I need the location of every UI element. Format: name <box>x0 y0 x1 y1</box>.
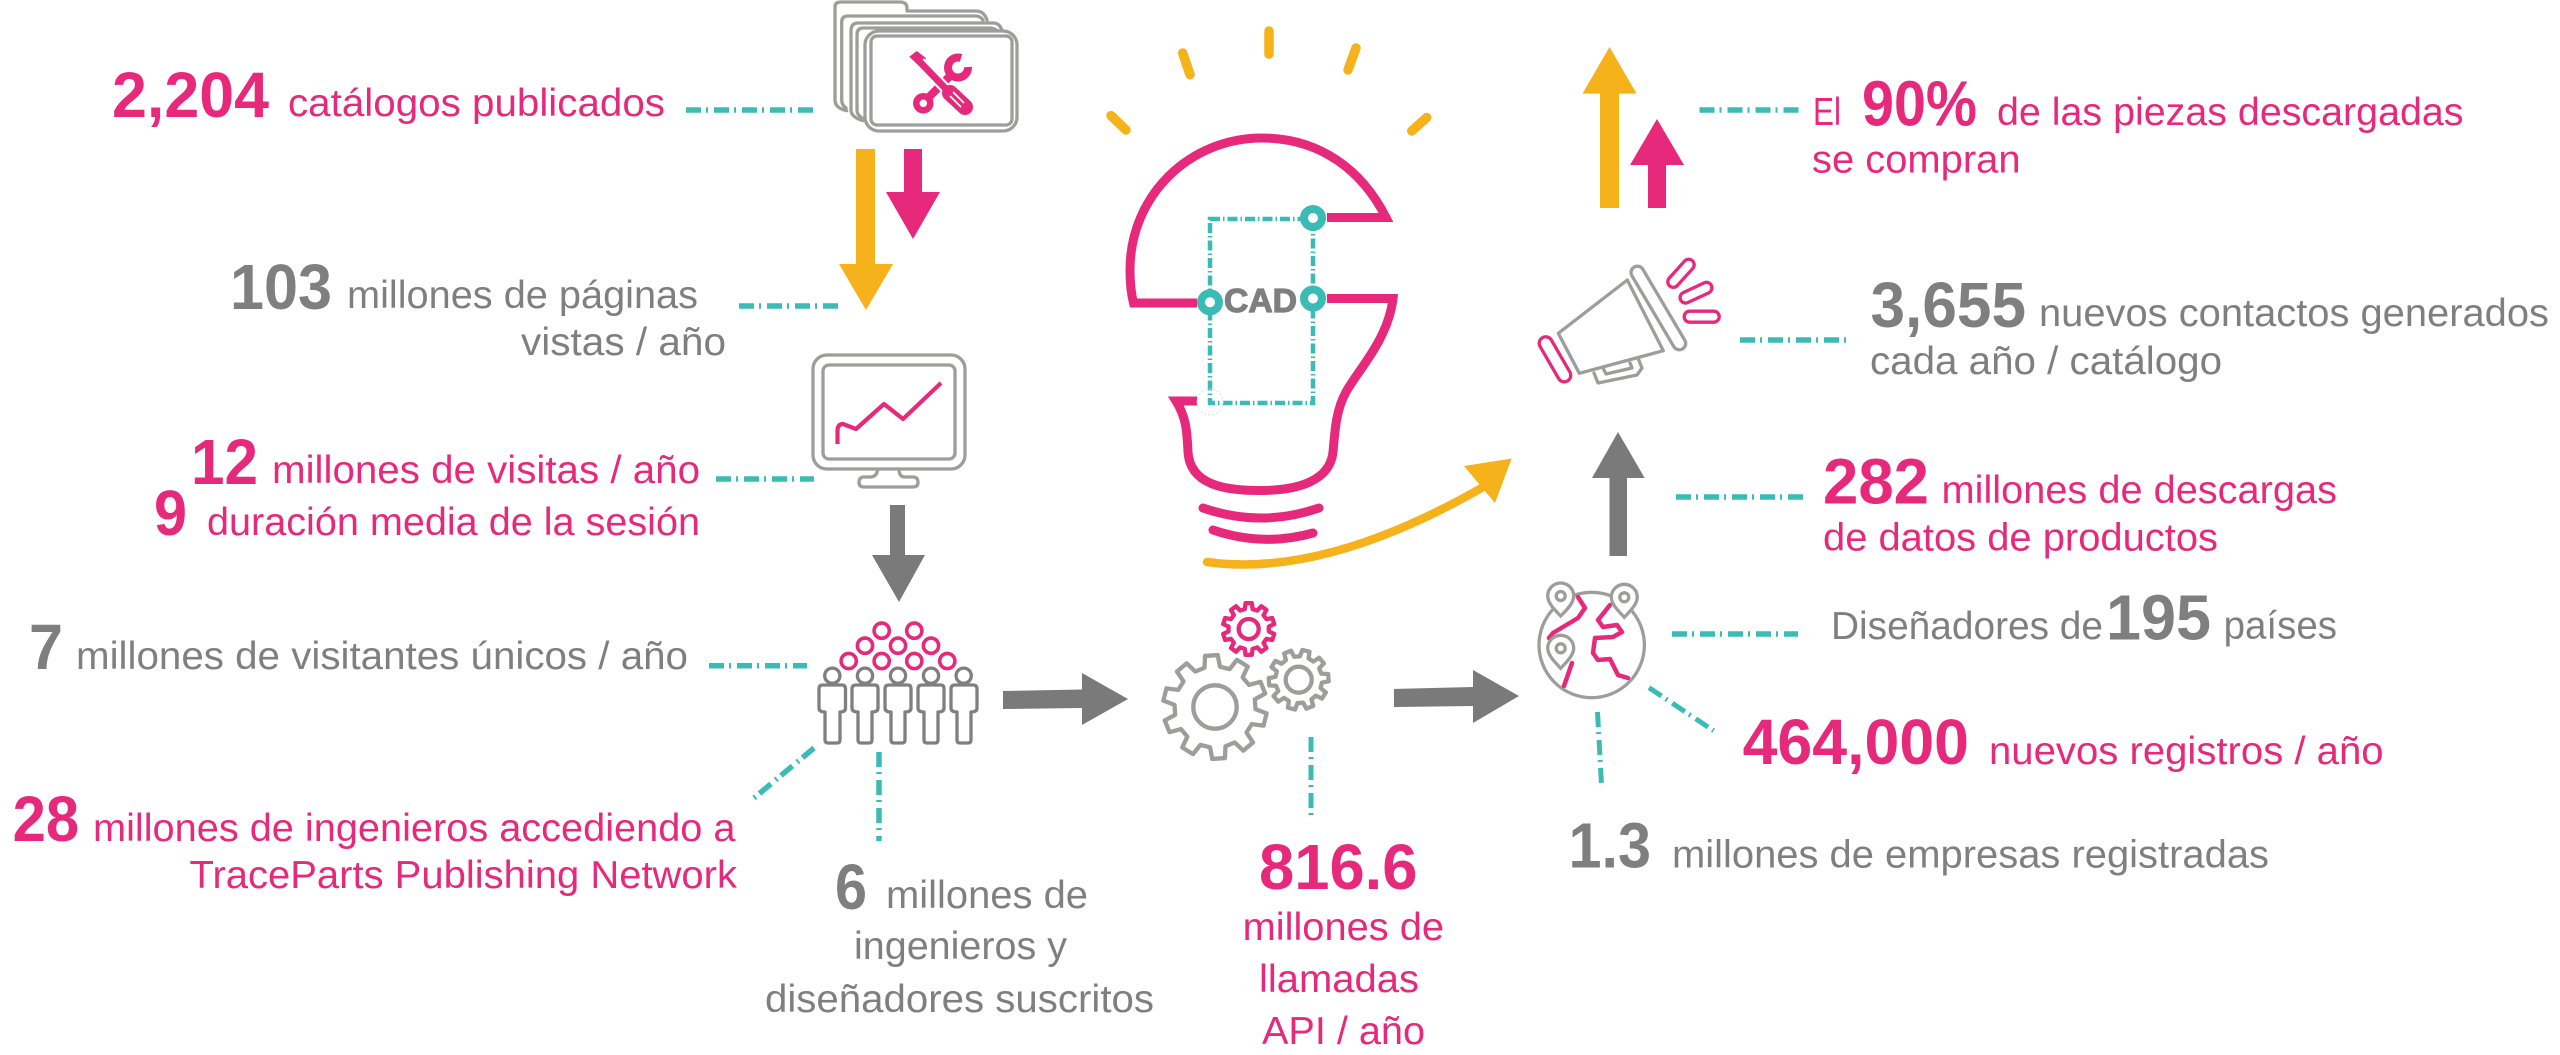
stat: paises <box>1831 581 2337 653</box>
stat: nuevos contactos <box>1870 269 2549 383</box>
stat: llamadas API: API / año <box>1262 1010 1425 1053</box>
stat: ingenieros suscritos: ingenieros y <box>854 925 1068 968</box>
stat: nuevos registros: 464,000 <box>1743 706 1969 778</box>
stat: ingenieros accediendo: TraceParts Publishing Network <box>190 854 738 897</box>
arrow: gray up <box>1592 432 1645 556</box>
stat: descargas: 282 <box>1823 446 1929 518</box>
stat: ingenieros suscritos: 6 <box>835 851 867 923</box>
stat: descargas: millones de descargas <box>1942 469 2337 512</box>
stat: paises: Diseñadores de <box>1831 605 2103 648</box>
stat: catalogos publicados <box>112 59 665 131</box>
arrow: gray right to globe <box>1394 670 1519 723</box>
stat: piezas compradas <box>1812 68 2464 182</box>
leader: ingenieros diagonal <box>754 748 814 798</box>
leader: visitantes <box>709 663 807 668</box>
stat: nuevos registros <box>1743 706 2384 778</box>
stat: nuevos contactos: 3,655 <box>1870 269 2026 341</box>
arrow: gray right to gears <box>1003 673 1128 725</box>
icon: group of people <box>819 623 977 743</box>
stat: visitantes unicos <box>29 611 688 683</box>
stat: piezas compradas: de las piezas descargadas <box>1997 91 2464 134</box>
stat: catalogos publicados: 2,204 <box>112 59 269 131</box>
icon: gears <box>1160 603 1334 762</box>
stat: visitas y duracion: millones de visitas / año <box>272 449 700 492</box>
stat: paginas vistas: 103 <box>230 251 332 323</box>
stat: visitas y duracion: duración media de la sesión <box>207 501 700 544</box>
leader: registros diagonal <box>1649 688 1714 731</box>
CAD label: CAD <box>1224 282 1297 319</box>
rays <box>1111 31 1427 131</box>
icon: light bulb with CAD <box>1111 31 1427 539</box>
leader: piezas <box>1700 107 1799 113</box>
stat: paises: 195 <box>2106 581 2211 653</box>
stat: llamadas API: 816.6 <box>1259 831 1418 903</box>
stat: ingenieros accediendo: millones de ingenieros accediendo a <box>93 807 736 850</box>
stat: empresas registradas <box>1568 810 2269 882</box>
stat: descargas: de datos de productos <box>1823 517 2218 560</box>
stat: visitas y duracion: 12 <box>191 426 258 498</box>
stat: ingenieros accediendo <box>13 783 738 897</box>
stat: llamadas API: llamadas <box>1259 958 1419 1001</box>
stat: visitantes unicos: millones de visitantes únicos / año <box>76 635 688 678</box>
arrow: yellow up <box>1582 47 1637 208</box>
stat: ingenieros suscritos: millones de <box>886 874 1088 917</box>
stat: nuevos contactos: cada año / catálogo <box>1870 340 2222 383</box>
stat: nuevos registros: nuevos registros / año <box>1989 730 2384 773</box>
stat: llamadas API <box>1243 831 1444 1053</box>
stat: ingenieros accediendo: 28 <box>13 783 79 855</box>
leader: catalogos <box>686 107 814 113</box>
leader: visitas <box>716 476 814 482</box>
arrow: yellow down <box>839 149 893 310</box>
stat: piezas compradas: El <box>1813 91 1841 134</box>
icon: megaphone <box>1537 257 1719 384</box>
stat: nuevos contactos: nuevos contactos generados <box>2039 292 2549 335</box>
stat: empresas registradas: 1.3 <box>1568 810 1651 882</box>
leader: suscritos vertical <box>876 752 882 841</box>
arrow: yellow curved <box>1207 458 1512 564</box>
leader: empresas vertical <box>1598 712 1602 788</box>
stat: paginas vistas: millones de páginas <box>347 274 698 317</box>
leader: paises <box>1672 631 1798 637</box>
stat: piezas compradas: se compran <box>1812 138 2021 182</box>
leader: descargas <box>1676 494 1803 500</box>
nodes <box>1201 209 1322 311</box>
arrow: pink down <box>886 149 940 239</box>
stat: paginas vistas: vistas / año <box>521 321 726 364</box>
arrow: pink up <box>1630 119 1684 208</box>
icon: globe with pins <box>1539 583 1644 698</box>
stat: empresas registradas: millones de empresas registradas <box>1672 834 2269 876</box>
stat: llamadas API: millones de <box>1243 906 1444 949</box>
stat: piezas compradas: 90% <box>1862 68 1977 140</box>
stat: paginas vistas <box>230 251 726 364</box>
stat: ingenieros suscritos <box>765 851 1154 1021</box>
bulb outline <box>1130 138 1393 539</box>
stat: ingenieros suscritos: diseñadores suscritos <box>765 978 1154 1021</box>
dashed CAD box <box>1210 219 1313 403</box>
arrow: gray down <box>872 505 925 602</box>
stat: catalogos publicados: catálogos publicados <box>288 82 665 125</box>
leader: API <box>1308 737 1314 817</box>
stat: visitas y duracion: 9 <box>154 477 187 549</box>
stat: paises: países <box>2224 604 2337 648</box>
leader: paginas <box>739 303 839 309</box>
icon: catalog folders with tools <box>835 2 1017 131</box>
leader: contactos <box>1740 337 1846 343</box>
stat: descargas <box>1823 446 2337 560</box>
icon: monitor with chart <box>813 355 965 487</box>
stat: visitas y duracion <box>154 426 700 549</box>
stat: visitantes unicos: 7 <box>29 611 63 683</box>
